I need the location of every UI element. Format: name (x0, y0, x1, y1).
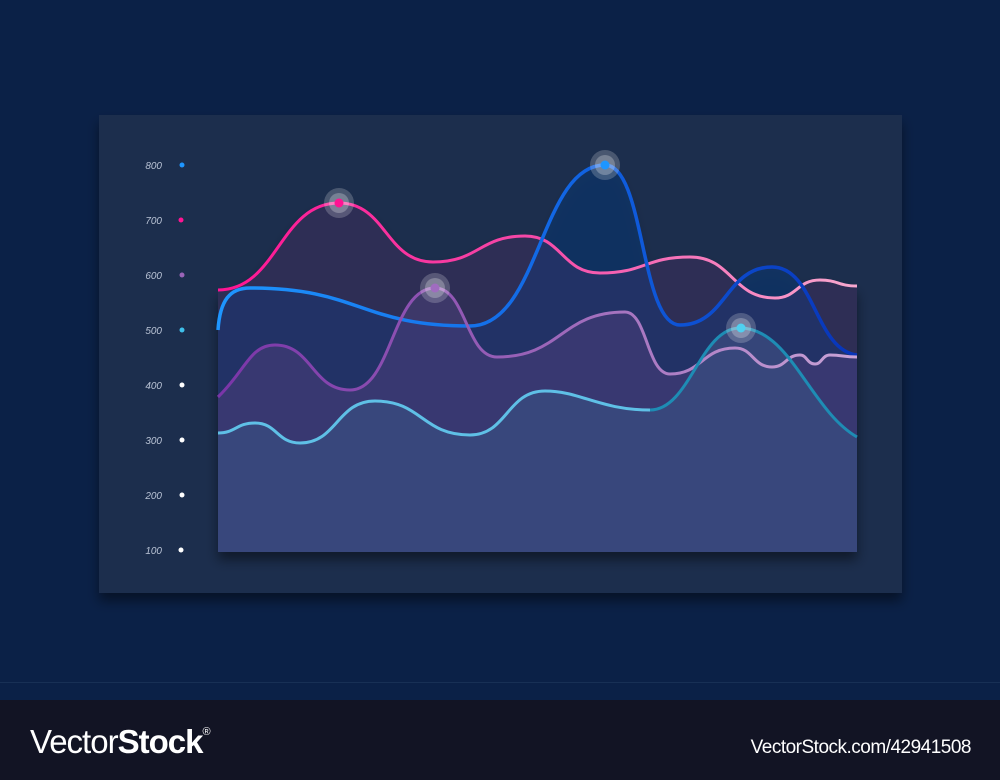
area: purple fill (218, 288, 857, 552)
area chart (218, 165, 857, 552)
marker: blue peak (590, 150, 620, 180)
y-axis labels (144, 161, 184, 557)
panel (99, 115, 902, 593)
line: purple (218, 288, 857, 397)
y-axis labels: 500 (145, 326, 162, 337)
line: teal (650, 328, 857, 437)
line: pink (218, 203, 857, 298)
area: light blue fill (218, 328, 857, 552)
marker: pink peak (324, 188, 354, 218)
y-axis labels: 600 (145, 271, 162, 282)
line: light blue (218, 391, 650, 443)
divider strip (0, 682, 1000, 683)
area: blue fill (218, 165, 857, 552)
line: blue (218, 165, 857, 355)
logo: ® (202, 726, 210, 738)
marker: teal peak (726, 313, 756, 343)
y-axis labels: 300 (145, 436, 162, 447)
area: pink fill (218, 203, 857, 552)
footer bar (0, 700, 1000, 780)
y-axis labels: 200 (144, 491, 162, 502)
y-axis labels: 100 (145, 546, 162, 557)
image id: VectorStock.com/42941508 (751, 737, 971, 758)
logo: VectorStock (30, 723, 202, 760)
marker: purple peak (420, 273, 450, 303)
y-axis labels: 400 (145, 381, 162, 392)
y-axis labels: 800 (145, 161, 162, 172)
y-axis labels: 700 (145, 216, 162, 227)
